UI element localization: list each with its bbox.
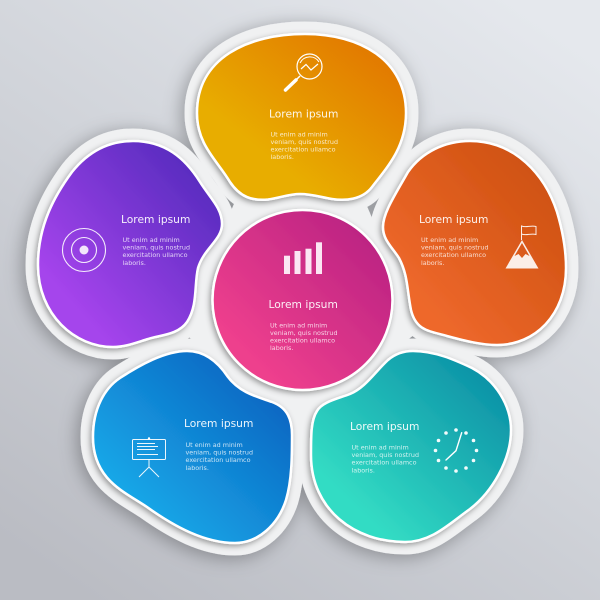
text block: blue petal: laboris. — [186, 464, 209, 472]
panel: center pink circle — [212, 210, 392, 390]
text block: purple petal: veniam, quis nostrud — [122, 244, 190, 252]
heading: orange-red petal: Lorem ipsum — [419, 213, 488, 226]
text block: orange-red petal: veniam, quis nostrud — [421, 244, 489, 252]
icon: clock — [434, 428, 478, 473]
panel: bottom-right teal petal — [311, 351, 511, 542]
panel: left purple petal — [38, 141, 222, 347]
text block: orange-red petal: exercitation ullamco — [421, 251, 486, 259]
white plates behind petals — [38, 34, 566, 543]
text block: purple petal: laboris. — [122, 259, 146, 267]
text block: top petal: exercitation ullamco — [270, 146, 336, 154]
panel: bottom-left blue petal — [93, 351, 292, 543]
text block: orange-red petal: laboris. — [421, 259, 444, 267]
icon: target — [62, 228, 106, 272]
panel: top orange petal — [197, 34, 406, 200]
text block: center circle: laboris. — [270, 344, 293, 352]
panel: right orange-red petal — [383, 141, 566, 345]
text block: center circle: Ut enim ad minim — [270, 322, 327, 330]
text block: orange-red petal: Ut enim ad minim — [421, 236, 478, 244]
text block: blue petal: exercitation ullamco — [186, 456, 251, 464]
heading: top petal: Lorem ipsum — [269, 108, 338, 120]
text block: center circle: exercitation ullamco — [270, 337, 335, 345]
text block: teal petal: exercitation ullamco — [352, 459, 417, 467]
icon: magnifier with chart — [286, 54, 322, 90]
icon: mountain with flag — [506, 226, 538, 268]
text block: purple petal: Ut enim ad minim — [122, 236, 180, 244]
heading: purple petal: Lorem ipsum — [121, 213, 190, 226]
text block: blue petal: Ut enim ad minim — [186, 441, 243, 449]
text block: teal petal: laboris. — [352, 466, 375, 474]
text block: teal petal: Ut enim ad minim — [352, 444, 409, 452]
heading: teal petal: Lorem ipsum — [350, 420, 419, 433]
icon: presentation board — [132, 437, 166, 477]
text block: center circle: veniam, quis nostrud — [270, 329, 338, 337]
heading: center circle: Lorem ipsum — [268, 298, 338, 311]
text block: teal petal: veniam, quis nostrud — [352, 451, 419, 459]
heading: blue petal: Lorem ipsum — [184, 417, 253, 430]
icon: bar chart — [284, 242, 322, 274]
text block: purple petal: exercitation ullamco — [122, 251, 188, 259]
text block: top petal: laboris. — [270, 153, 294, 161]
text block: top petal: veniam, quis nostrud — [270, 138, 338, 146]
text block: top petal: Ut enim ad minim — [270, 130, 328, 138]
text block: blue petal: veniam, quis nostrud — [186, 449, 253, 457]
